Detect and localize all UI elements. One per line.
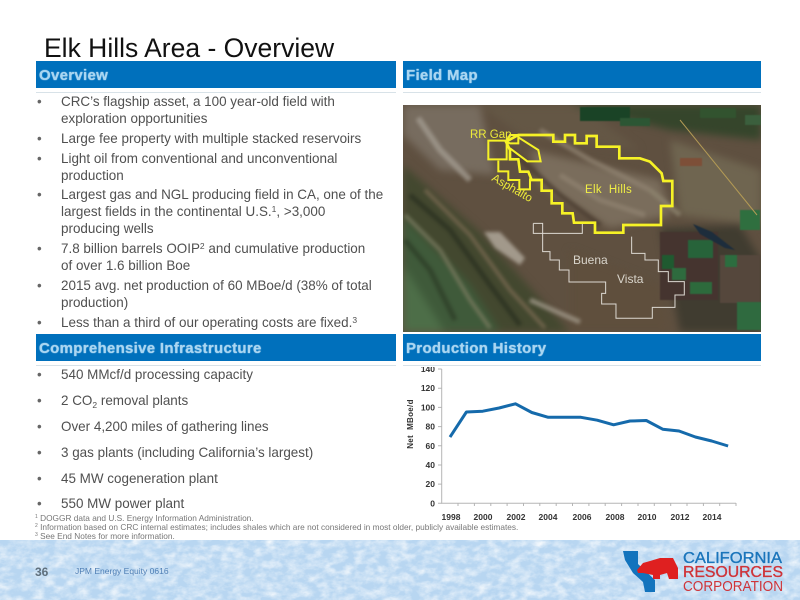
- text: •: [37, 445, 42, 460]
- title: Elk Hills Area - Overview: [44, 33, 334, 63]
- y axis labels: 120: [421, 383, 435, 393]
- text: •: [37, 151, 42, 166]
- text: •: [37, 419, 42, 434]
- text block: overview bullets: production: [61, 168, 124, 183]
- panel heading: Comprehensive Infrastructure: [36, 334, 396, 361]
- map labels: Buena: [573, 253, 608, 267]
- text block: infrastructure bullets: 540 MMcf/d processing capacity: [61, 367, 253, 382]
- text block: overview bullets: production): [61, 295, 128, 310]
- x axis labels: 2006: [573, 512, 592, 522]
- text block: overview bullets: [37, 94, 383, 330]
- text: •: [37, 94, 42, 109]
- text block: overview bullets: 7.8 billion barrels OOIP2 and cumulative production: [61, 241, 365, 256]
- footnotes: [35, 513, 518, 541]
- terrain: ridges and pale valley: [405, 118, 680, 328]
- panel heading: Overview: [36, 61, 396, 88]
- footnotes: 2 Information based on CRC internal estimates; includes shales which are not considered in most older, publicly available estimates.: [35, 522, 518, 532]
- line chart: production history: [406, 367, 736, 522]
- field map: [403, 105, 761, 332]
- y axis labels: 80: [426, 422, 435, 432]
- footnotes: 1 DOGGR data and U.S. Energy Information Administration.: [35, 513, 254, 523]
- text block: overview bullets: Light oil from conventional and unconventional: [61, 151, 337, 166]
- x axis labels: 2002: [507, 512, 526, 522]
- text block: overview bullets: producing wells: [61, 221, 154, 236]
- x axis labels: 2012: [671, 512, 690, 522]
- y axis labels: 0: [430, 498, 435, 508]
- panel heading: Field Map: Field Map: [406, 67, 478, 84]
- text block: overview bullets: exploration opportunities: [61, 111, 207, 126]
- text: •: [37, 241, 42, 256]
- y axis labels: 20: [426, 479, 435, 489]
- Elk Hills, RR Gap and Asphalto boundaries: [488, 135, 672, 233]
- text block: infrastructure bullets: Over 4,200 miles of gathering lines: [61, 419, 269, 434]
- map labels: RR Gap: [470, 129, 512, 141]
- logo wordmark: CALIFORNIA: [683, 550, 782, 567]
- x axis labels: 2004: [539, 512, 558, 522]
- text: •: [37, 315, 42, 330]
- map labels: Vista: [617, 272, 644, 286]
- text: •: [37, 187, 42, 202]
- y axis labels: [421, 364, 435, 508]
- text block: infrastructure bullets: 550 MW power plant: [61, 496, 184, 511]
- text: •: [37, 367, 42, 382]
- map labels: Elk Hills: [585, 184, 632, 196]
- logo wordmark: [683, 550, 783, 595]
- y axis labels: 60: [426, 441, 435, 451]
- text: •: [37, 131, 42, 146]
- y axis labels: 40: [426, 460, 435, 470]
- chart axes: [438, 369, 736, 506]
- footnotes: 3 See End Notes for more information.: [35, 531, 175, 541]
- panel heading: Production History: [403, 334, 761, 361]
- x axis labels: 1998: [442, 512, 461, 522]
- panel heading: Production History: Production History: [406, 340, 546, 357]
- production line: [450, 404, 728, 446]
- logo wordmark: RESOURCES: [683, 564, 783, 581]
- footer band: [0, 540, 800, 600]
- icon: red bear: [637, 558, 678, 579]
- text block: infrastructure bullets: 45 MW cogeneration plant: [61, 471, 218, 486]
- text block: infrastructure bullets: 3 gas plants (including California’s largest): [61, 445, 313, 460]
- text: •: [37, 496, 42, 511]
- Buena Vista boundary: [533, 223, 684, 318]
- logo: California Resources Corporation: [623, 550, 783, 595]
- text block: overview bullets: CRC’s flagship asset, a 100 year-old field with: [61, 94, 335, 109]
- y axis title: Net MBoe/d: [406, 399, 415, 449]
- icon: California state shape: [623, 551, 655, 592]
- satellite base: [403, 105, 761, 332]
- text block: infrastructure bullets: [37, 367, 313, 511]
- x axis labels: 2014: [703, 512, 722, 522]
- page number: 36: [35, 565, 48, 579]
- text block: overview bullets: Large fee property with multiple stacked reservoirs: [61, 131, 361, 146]
- text: •: [37, 393, 42, 408]
- farm fields: [580, 107, 761, 330]
- map labels: Asphalto: [490, 172, 534, 205]
- text block: overview bullets: 2015 avg. net production of 60 MBoe/d (38% of total: [61, 278, 372, 293]
- text: •: [37, 471, 42, 486]
- text block: infrastructure bullets: 2 CO2 removal plants: [61, 393, 188, 410]
- y axis labels: 100: [421, 402, 435, 412]
- text block: overview bullets: largest fields in the continental U.S.1, >3,000: [61, 204, 325, 219]
- panel heading: Comprehensive Infrastructure: Comprehensive Infrastructure: [39, 340, 262, 357]
- text block: overview bullets: Largest gas and NGL producing field in CA, one of the: [61, 187, 383, 202]
- x axis labels: 2000: [474, 512, 493, 522]
- footer event label: JPM Energy Equity 0616: [75, 566, 169, 576]
- x axis labels: [442, 512, 722, 522]
- x axis labels: 2008: [606, 512, 625, 522]
- panel heading: Field Map: [403, 61, 761, 88]
- text block: overview bullets: Less than a third of our operating costs are fixed.3: [61, 315, 357, 330]
- x axis labels: 2010: [638, 512, 657, 522]
- map labels: [470, 129, 644, 286]
- panel heading: Overview: Overview: [39, 67, 108, 84]
- text: •: [37, 278, 42, 293]
- text block: overview bullets: of over 1.6 billion Boe: [61, 258, 190, 273]
